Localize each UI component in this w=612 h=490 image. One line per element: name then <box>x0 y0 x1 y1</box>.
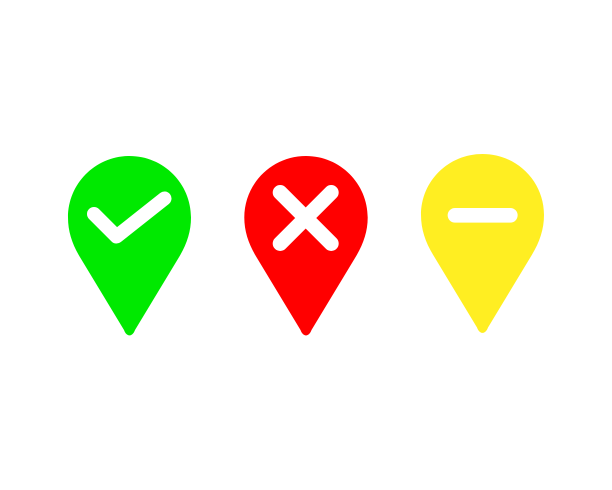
icon: red pin with cross mark <box>244 156 368 335</box>
icon: green pin with check mark <box>68 156 191 335</box>
icon: yellow pin with minus mark <box>421 154 544 333</box>
